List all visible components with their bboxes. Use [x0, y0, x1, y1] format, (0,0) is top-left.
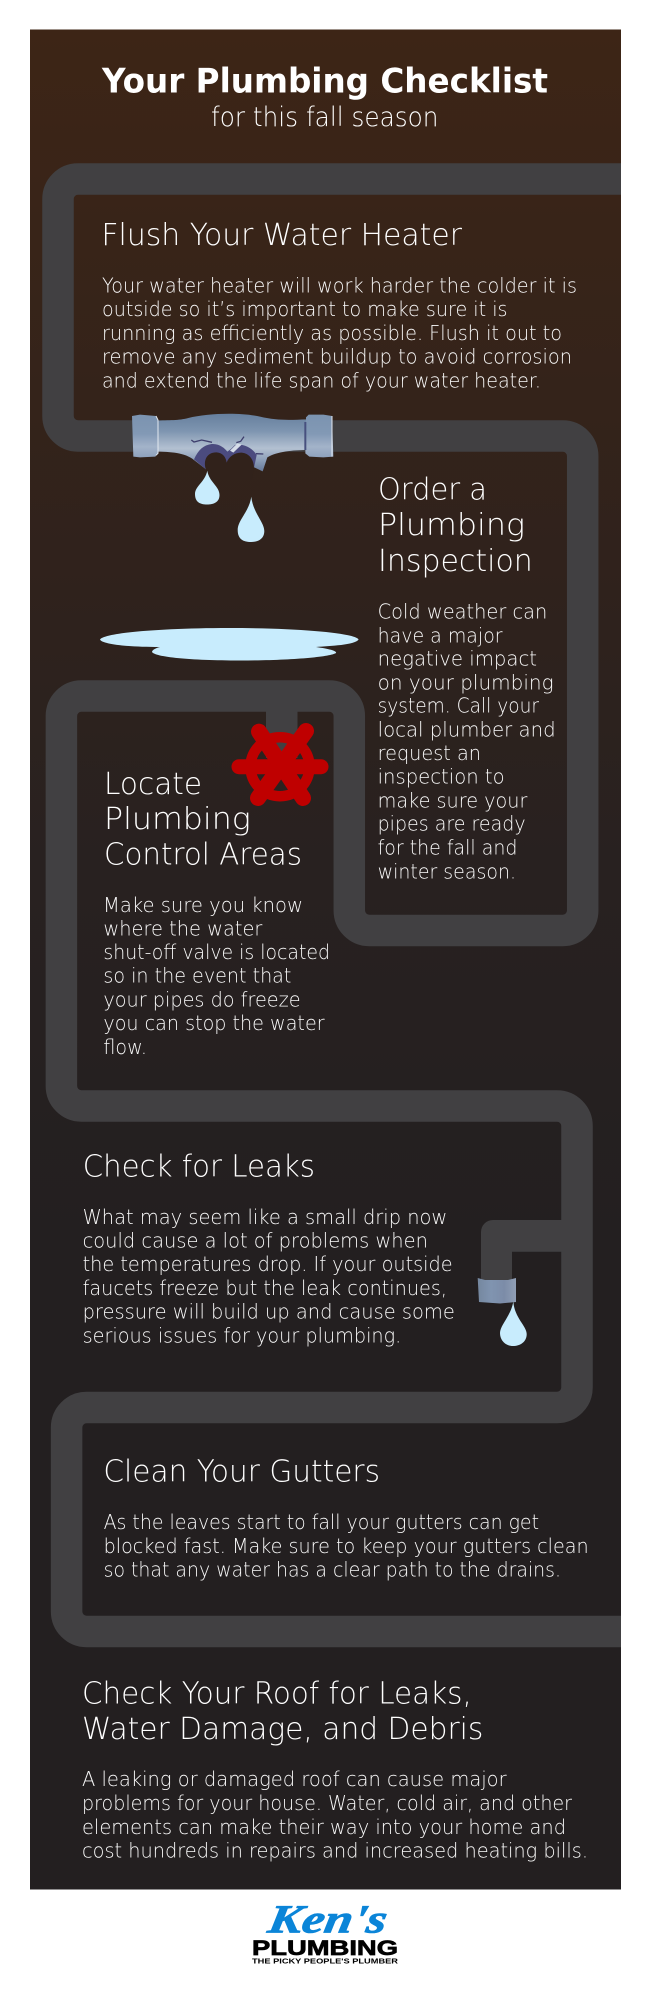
icon: broken pipe — [132, 414, 333, 480]
pipe: main serpentine — [58, 179, 621, 1632]
body text: so that any water has a clear path to the drains. — [104, 1557, 561, 1581]
heading — [104, 767, 302, 872]
body text: and extend the life span of your water heater. — [102, 368, 541, 392]
faucet drop — [500, 1302, 527, 1346]
title: for this fall season — [211, 102, 438, 133]
right collar — [305, 415, 333, 457]
heading: Check for Leaks — [83, 1150, 315, 1185]
faucet collar — [478, 1278, 516, 1304]
section: flush your water heater — [101, 218, 577, 392]
logo: THE PICKY PEOPLE'S PLUMBER — [252, 1956, 399, 1966]
heading: Water Damage, and Debris — [82, 1712, 483, 1747]
body text — [378, 599, 556, 883]
body text: local plumber and — [378, 718, 556, 742]
body text: As the leaves start to fall your gutters can get — [104, 1510, 539, 1534]
title — [101, 62, 548, 133]
body text: remove any sediment buildup to avoid corrosion — [102, 344, 572, 368]
icon: water drop — [195, 471, 220, 504]
section: locate plumbing control areas — [103, 767, 330, 1059]
collar shadow — [302, 422, 308, 450]
heading: Inspection — [378, 544, 533, 579]
body text: faucets freeze but the leak continues, — [83, 1276, 447, 1300]
heading: Order a — [378, 472, 487, 507]
body text: problems for your house. Water, cold air, and other — [82, 1791, 573, 1815]
title: Your Plumbing Checklist — [101, 62, 548, 102]
body text: Make sure you know — [103, 893, 303, 917]
icon: red valve wheel — [239, 731, 321, 798]
heading: Check Your Roof for Leaks, — [82, 1676, 472, 1711]
body text: your pipes do freeze — [103, 988, 301, 1012]
body text: make sure your — [378, 788, 528, 812]
left collar — [132, 415, 158, 457]
body text: system. Call your — [378, 694, 540, 718]
body text: shut-off valve is located — [103, 940, 330, 964]
body text: winter season. — [378, 859, 516, 883]
section: clean your gutters — [103, 1455, 589, 1581]
body text: blocked fast. Make sure to keep your gutters clean — [104, 1534, 589, 1558]
body text: Your water heater will work harder the colder it is — [102, 274, 577, 298]
section: check your roof — [82, 1676, 588, 1862]
collar highlight — [156, 416, 332, 457]
body text: where the water — [103, 917, 263, 941]
heading: Control Areas — [104, 837, 302, 872]
body text: pressure will build up and cause some — [83, 1300, 455, 1324]
section: order a plumbing inspection — [378, 472, 556, 883]
body text: inspection to — [378, 764, 505, 788]
torn rim — [194, 444, 257, 469]
logo: Ken's — [264, 1897, 391, 1941]
body text: outside so it’s important to make sure it is — [102, 297, 508, 321]
body text: could cause a lot of problems when — [83, 1229, 428, 1253]
body text: cost hundreds in repairs and increased heating bills. — [82, 1838, 588, 1862]
body text: serious issues for your plumbing. — [83, 1323, 401, 1347]
body text: request an — [378, 741, 481, 765]
heading: Clean Your Gutters — [103, 1455, 380, 1490]
icon: puddle — [100, 628, 359, 660]
body text — [102, 274, 577, 392]
body text — [104, 1510, 589, 1581]
body text: on your plumbing — [378, 670, 554, 694]
section: check for leaks — [83, 1150, 455, 1347]
heading: Plumbing — [378, 508, 525, 543]
body text: have a major — [378, 623, 503, 647]
body text: you can stop the water — [103, 1011, 325, 1035]
holes — [205, 452, 254, 480]
logo — [252, 1897, 399, 1966]
body text — [103, 893, 330, 1059]
body text — [83, 1205, 455, 1347]
icon: dripping faucet — [478, 1278, 527, 1346]
body text: negative impact — [378, 647, 537, 671]
pipe: valve stub — [266, 708, 298, 758]
pipe body — [155, 414, 307, 471]
icon: water drop — [238, 497, 264, 542]
pipe: faucet branch — [481, 1220, 565, 1280]
body text: pipes are ready — [378, 812, 526, 836]
heading — [378, 472, 533, 579]
body text: A leaking or damaged roof can cause major — [82, 1767, 507, 1791]
body text: Cold weather can — [378, 599, 547, 623]
cracks — [191, 437, 263, 454]
body text: for the fall and — [378, 835, 517, 859]
heading: Locate — [104, 767, 202, 802]
heading: Flush Your Water Heater — [101, 218, 462, 253]
body text: running as efficiently as possible. Flush it out to — [102, 321, 562, 345]
body text: What may seem like a small drip now — [83, 1205, 447, 1229]
body text: so in the event that — [103, 964, 291, 988]
body text: flow. — [103, 1035, 147, 1059]
body text: the temperatures drop. If your outside — [83, 1252, 453, 1276]
torn highlight — [230, 443, 242, 453]
logo: PLUMBING — [252, 1937, 398, 1960]
body text — [82, 1767, 588, 1862]
heading — [82, 1676, 483, 1747]
body text: elements can make their way into your home and — [82, 1815, 566, 1839]
heading: Plumbing — [104, 802, 251, 837]
